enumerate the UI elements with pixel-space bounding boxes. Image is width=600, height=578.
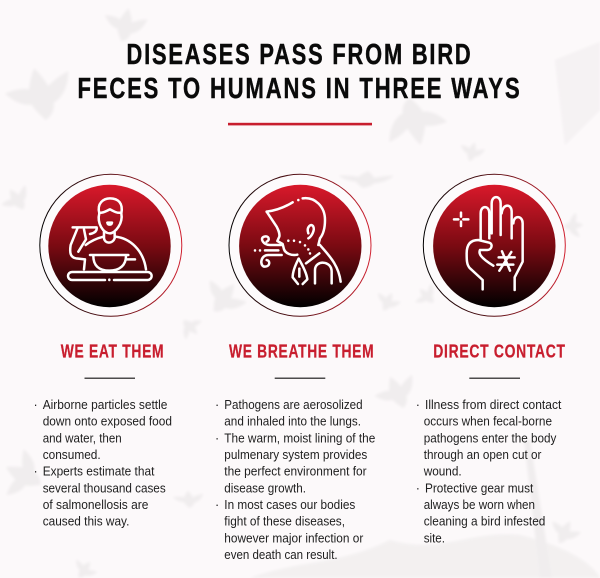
icon circle: person eating [40, 174, 182, 316]
text block: we breathe them: · [215, 498, 219, 512]
text block: we eat them: · [34, 398, 38, 412]
text block: direct contact: Illness from direct contact [425, 398, 562, 412]
text block: we eat them [34, 398, 172, 529]
icon circle: wounded hand [423, 174, 565, 316]
title [78, 39, 522, 105]
text block: direct contact: pathogens enter the body [424, 431, 557, 445]
divider [84, 378, 135, 379]
text block: we breathe them: · [215, 398, 219, 412]
text block: we eat them: down onto exposed food [43, 415, 172, 429]
text block: we breathe them: the perfect environment for [224, 465, 367, 479]
divider [275, 378, 325, 379]
title: DISEASES PASS FROM BIRD [126, 39, 472, 71]
text block: direct contact: always be worn when [424, 498, 535, 512]
icon circle: person coughing [229, 174, 371, 316]
text block: we eat them: of salmonellosis are [43, 498, 148, 512]
text block: we breathe them [215, 398, 375, 562]
text block: we eat them: Experts estimate that [43, 465, 155, 479]
text block: we breathe them: disease growth. [224, 481, 306, 495]
text block: we breathe them: however major infection or [224, 531, 363, 545]
text block: we eat them: consumed. [43, 448, 101, 462]
text block: direct contact [416, 398, 562, 545]
panel: direct contact [416, 174, 566, 545]
text block: we eat them: several thousand cases [43, 481, 166, 495]
heading: we breathe them: WE BREATHE THEM [229, 342, 374, 362]
text block: direct contact: · [416, 481, 420, 495]
text block: we eat them: Airborne particles settle [43, 398, 167, 412]
panel: we breathe them [215, 174, 375, 562]
text block: direct contact: occurs when fecal-borne [424, 415, 552, 429]
text block: direct contact: wound. [423, 465, 462, 479]
text block: direct contact: cleaning a bird infested [424, 515, 545, 529]
text block: we breathe them: fight of these diseases, [224, 515, 345, 529]
panel: we eat them [34, 174, 182, 529]
text block: we breathe them: Pathogens are aerosolized [224, 398, 363, 412]
heading: direct contact: DIRECT CONTACT [433, 342, 566, 362]
text block: we eat them: caused this way. [43, 515, 129, 529]
text block: we breathe them: In most cases our bodies [224, 498, 355, 512]
text block: we breathe them: pulmenary system provides [224, 448, 367, 462]
text block: we breathe them: The warm, moist lining of the [224, 431, 375, 445]
text block: we eat them: · [34, 465, 38, 479]
text block: direct contact: · [416, 398, 420, 412]
divider [469, 378, 520, 379]
text block: we breathe them: even death can result. [224, 548, 338, 562]
title underline [228, 123, 372, 125]
text block: we eat them: and water, then [43, 431, 122, 445]
text block: direct contact: through an open cut or [424, 448, 541, 462]
text block: we breathe them: · [215, 431, 219, 445]
text block: direct contact: site. [424, 531, 445, 545]
heading: we eat them: WE EAT THEM [61, 342, 164, 362]
text block: direct contact: Protective gear must [425, 481, 534, 495]
text block: we breathe them: and inhaled into the lungs. [224, 415, 361, 429]
